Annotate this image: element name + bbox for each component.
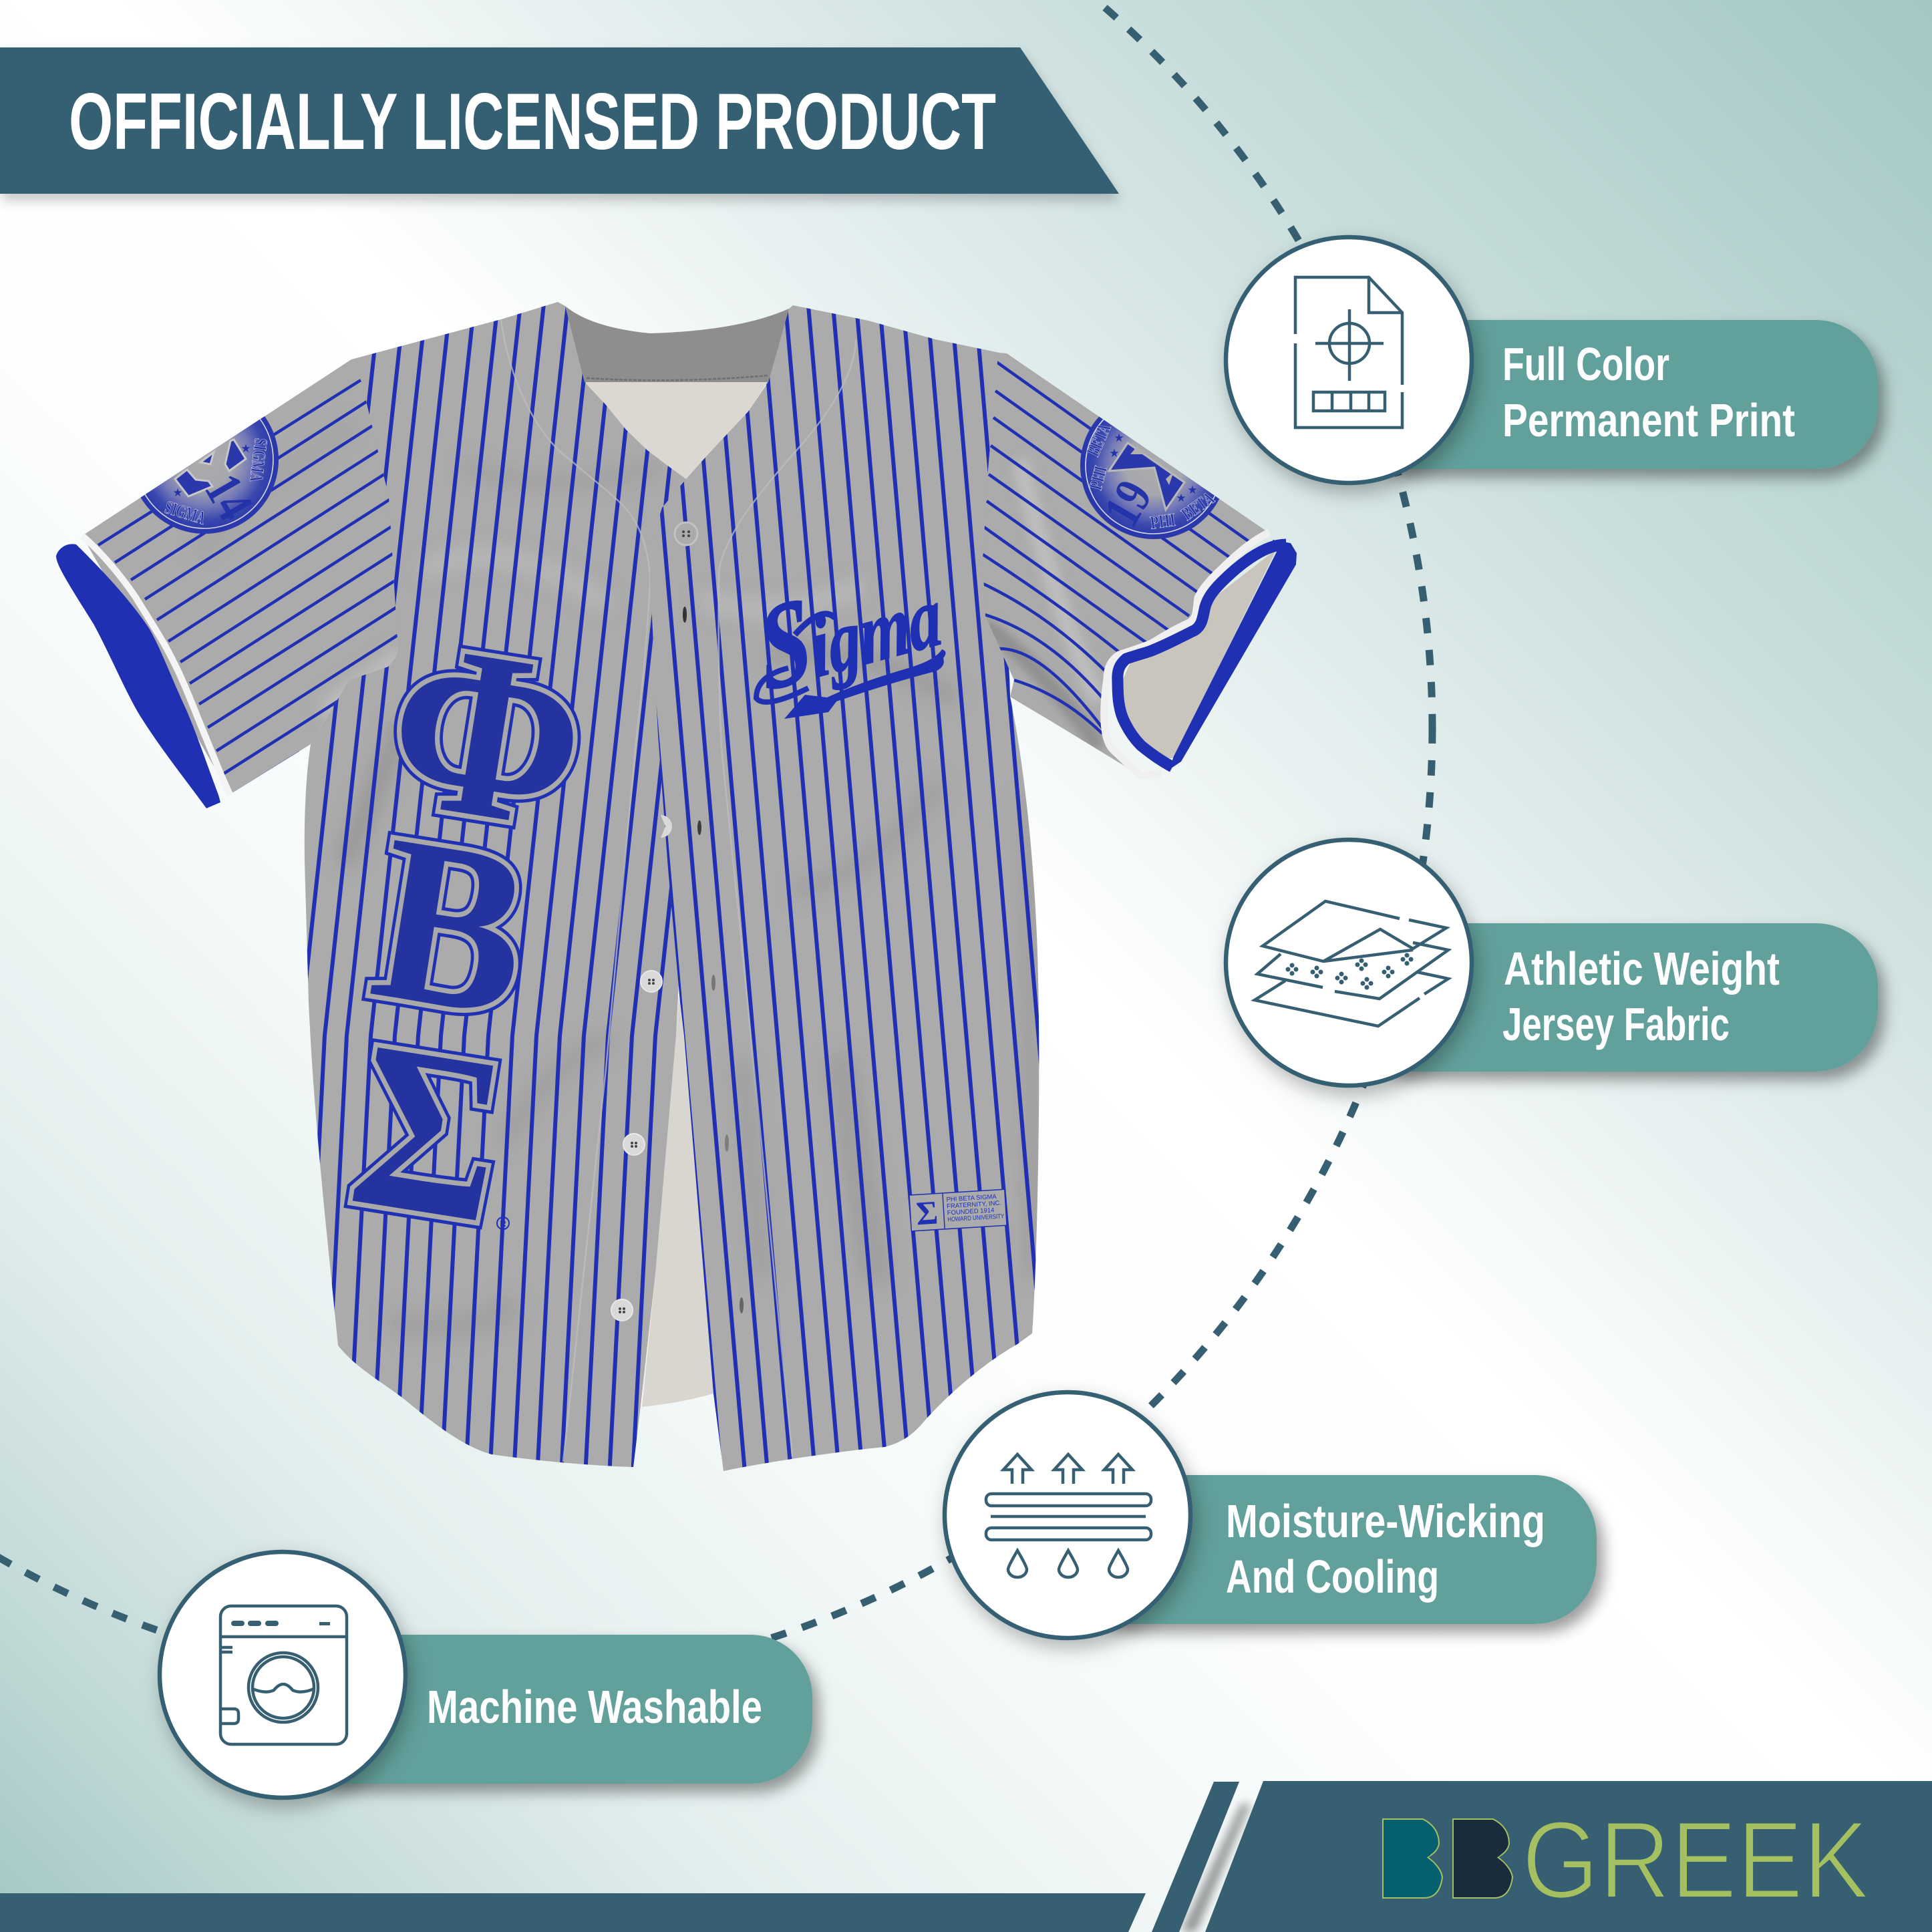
script wordmark: Sigma bbox=[752, 536, 947, 717]
jersey woven label: FOUNDED 1914 bbox=[947, 1206, 995, 1217]
left sleeve seal patch bbox=[140, 416, 279, 534]
left sleeve inner lining sliver bbox=[79, 569, 126, 632]
letter beta: Β bbox=[359, 785, 545, 1067]
icon circle: washing machine bbox=[160, 1552, 406, 1798]
letter phi: Φ bbox=[373, 588, 602, 881]
icon circle: moisture wicking bbox=[945, 1392, 1190, 1638]
right sleeve seal patch: ★ bbox=[1109, 447, 1120, 460]
jersey bbox=[56, 267, 1297, 1503]
right sleeve inner lining bbox=[1119, 549, 1277, 758]
right sleeve seal patch: ★ bbox=[1187, 484, 1198, 497]
jersey back collar bbox=[565, 306, 789, 385]
jersey left front panel bbox=[277, 267, 739, 1490]
letter phi: Φ bbox=[373, 588, 602, 881]
left sleeve seal patch: SIGMA bbox=[162, 497, 208, 529]
registered mark bbox=[497, 1217, 509, 1229]
pill: athletic weight jersey fabric bbox=[1349, 923, 1878, 1072]
right sleeve seal patch: PHI bbox=[1086, 464, 1112, 492]
pill: moisture-wicking and cooling: And Cooling bbox=[1226, 1551, 1439, 1603]
right sleeve bbox=[982, 353, 1269, 776]
right sleeve seal patch: PHI bbox=[1149, 510, 1177, 534]
letter sigma: Σ bbox=[337, 992, 521, 1273]
jersey collar stitching bbox=[587, 375, 768, 380]
right sleeve seal patch: BETA bbox=[1178, 488, 1219, 525]
jersey right front panel bbox=[617, 267, 1079, 1503]
left sleeve white trim bbox=[82, 536, 230, 794]
jersey woven label: HOWARD UNIVERSITY bbox=[947, 1213, 1005, 1224]
pill: full color permanent print bbox=[1349, 320, 1878, 469]
right sleeve white trim bbox=[1104, 532, 1269, 776]
right sleeve seal patch: ★ bbox=[1176, 492, 1186, 505]
logo first B: B bbox=[1383, 1802, 1442, 1918]
right sleeve seal patch bbox=[1080, 417, 1220, 539]
jersey woven label: FRATERNITY, INC. bbox=[947, 1200, 1001, 1211]
dashed connector circle bbox=[0, 0, 1432, 1685]
jersey lower lining bbox=[642, 995, 713, 1407]
bottom slanted stripe bbox=[1152, 1782, 1251, 1932]
right sleeve seal patch: ★ bbox=[1114, 432, 1124, 445]
logo second B: B bbox=[1453, 1802, 1512, 1918]
jersey woven label: PHI BETA SIGMA bbox=[946, 1193, 997, 1204]
pill: machine washable bbox=[283, 1635, 812, 1784]
pill: athletic weight jersey fabric: Athletic Weight bbox=[1504, 943, 1780, 995]
icon circle: fabric layers bbox=[1226, 840, 1472, 1086]
pill: moisture-wicking and cooling bbox=[1068, 1475, 1597, 1624]
pill: athletic weight jersey fabric: Jersey Fabric bbox=[1502, 998, 1730, 1050]
pill: full color permanent print: Permanent Print bbox=[1502, 394, 1795, 446]
letter sigma: Σ bbox=[337, 992, 521, 1273]
banner: officially licensed product bbox=[0, 47, 1119, 194]
pill: moisture-wicking and cooling: Moisture-Wicking bbox=[1226, 1495, 1545, 1547]
left sleeve seal patch: ★ bbox=[240, 442, 251, 456]
jersey buttonholes bbox=[683, 607, 744, 1313]
pill: machine washable: Machine Washable bbox=[427, 1681, 762, 1733]
jersey buttons bbox=[611, 522, 697, 1321]
registered mark: R bbox=[500, 1219, 506, 1229]
left sleeve blue cuff bbox=[56, 544, 220, 808]
logo word greek: GREEK bbox=[1522, 1798, 1869, 1921]
left sleeve seal patch: SIGMA bbox=[245, 437, 271, 484]
right sleeve seal patch: BETA bbox=[1083, 420, 1116, 460]
pill: full color permanent print: Full Color bbox=[1502, 338, 1669, 390]
letter sigma: Σ bbox=[337, 992, 521, 1273]
letter beta: Β bbox=[359, 785, 545, 1067]
bottom left bar bbox=[0, 1893, 1146, 1932]
logo: bbgreek bbox=[1383, 1798, 1869, 1921]
right sleeve blue cuff bbox=[1118, 540, 1297, 770]
left sleeve seal patch: 14 bbox=[194, 464, 265, 529]
left sleeve seal patch: ★ bbox=[172, 486, 183, 500]
letter phi: Φ bbox=[373, 588, 602, 881]
left sleeve bbox=[82, 359, 401, 794]
letter beta: Β bbox=[359, 785, 545, 1067]
jersey woven label bbox=[909, 1189, 1007, 1233]
jersey woven label: Σ bbox=[915, 1193, 939, 1232]
banner: officially licensed product: OFFICIALLY LICENSED PRODUCT bbox=[69, 77, 996, 166]
right sleeve seal patch: 19 bbox=[1092, 470, 1163, 536]
jersey neck lining bbox=[586, 382, 768, 491]
icon circle: print file bbox=[1226, 237, 1472, 483]
bottom right logo panel bbox=[1205, 1781, 1932, 1932]
